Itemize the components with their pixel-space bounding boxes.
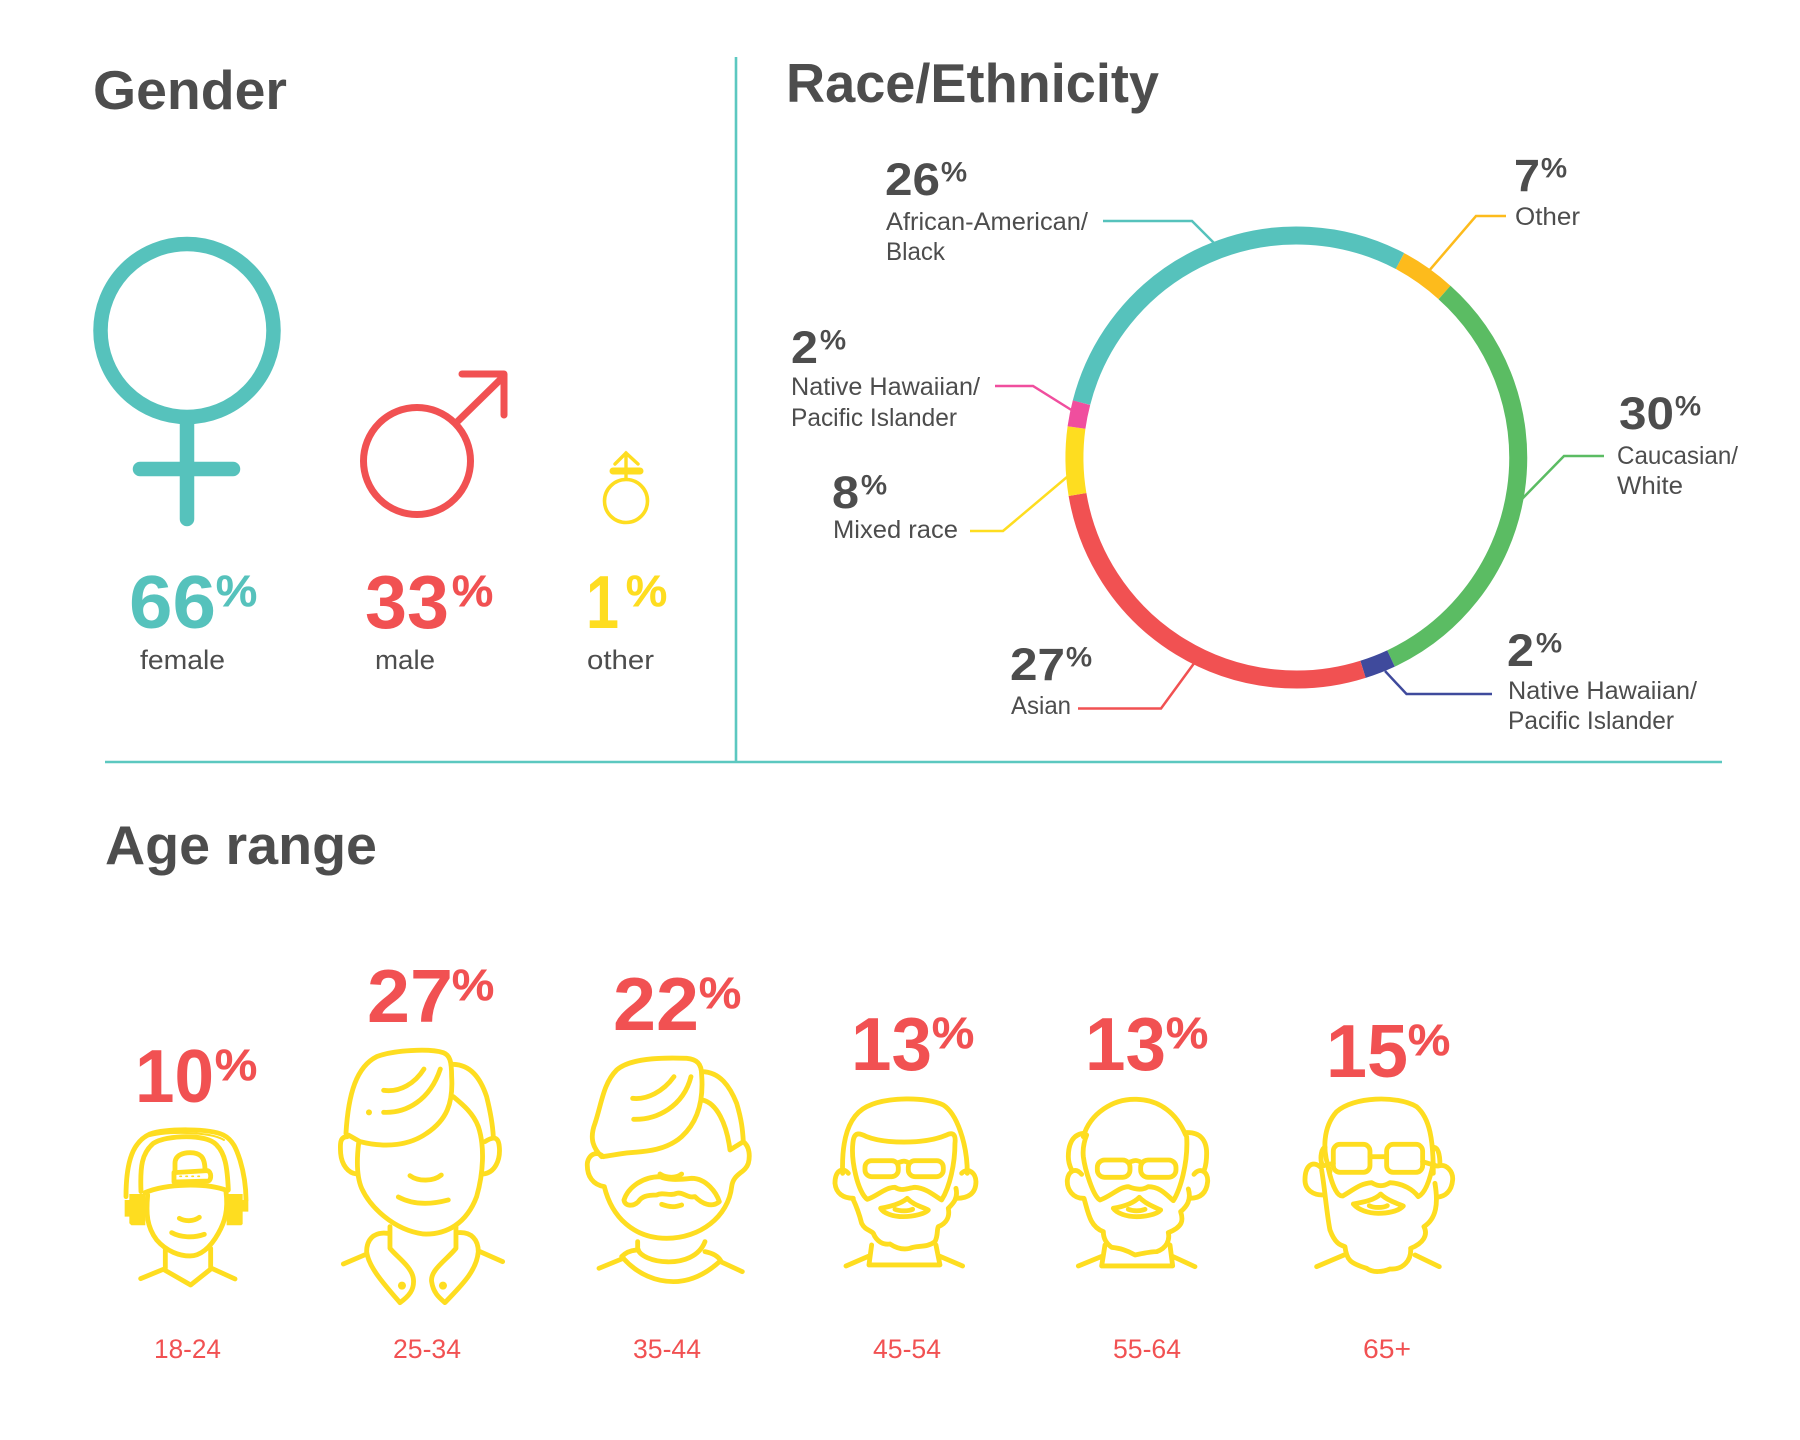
callout: 2% Native Hawaiian/Pacific Islander (left): % [820,325,846,355]
callout: 7% Other: Other [1515,203,1580,231]
age group 18-24 [125,1034,257,1364]
callout: 2% Native Hawaiian/Pacific Islander (left): Pacific Islander [791,404,957,432]
callout: 30% Caucasian/White: % [1675,391,1701,421]
callout: 7% Other [1428,150,1580,272]
age group 25-34: 25-34 [393,1334,461,1364]
callout: 7% Other: 7 [1514,150,1540,201]
callout: 26% African-American/Black [885,154,1216,266]
age group 18-24: 18-24 [154,1334,221,1364]
age group 35-44: % [699,970,741,1018]
stat: 33% male: male [375,645,435,675]
callout: 2% Native Hawaiian/Pacific Islander (right): 2 [1507,625,1534,676]
icon: senior with large glasses and long beard [1305,1099,1453,1272]
stat: 66% female: % [216,568,257,616]
stat: 1% other: other [587,645,654,675]
age group 25-34: % [452,962,494,1010]
age group 25-34: 27 [367,954,453,1038]
callout: 27% Asian: Asian [1011,692,1071,720]
age group 45-54 [835,1002,976,1364]
age group 65+: % [1408,1017,1450,1065]
stat: 66% female [129,560,257,675]
age group 55-64: % [1166,1010,1208,1058]
panel: age range [105,814,1453,1364]
callout: 7% Other: % [1541,153,1567,183]
stat: 1% other: 1 [586,560,619,644]
callout: 2% Native Hawaiian/Pacific Islander (left): Native Hawaiian/ [791,373,980,401]
callout: 30% Caucasian/White [1522,388,1738,500]
callout: 26% African-American/Black: African-American/ [886,208,1088,236]
callout: 8% Mixed race: 8 [832,467,859,518]
callout: 27% Asian [1010,639,1195,720]
age group 65+ [1305,1009,1453,1364]
callout: 26% African-American/Black: Black [886,238,945,266]
callout: 26% African-American/Black: % [941,157,967,187]
age group 35-44 [587,962,749,1364]
heading: Gender: Gender [93,59,287,121]
stat: 66% female: 66 [129,560,216,644]
age group 35-44: 35-44 [633,1334,701,1364]
stat: 33% male: % [452,568,493,616]
age group 45-54: 13 [851,1002,932,1086]
callout: 2% Native Hawaiian/Pacific Islander (right): Pacific Islander [1508,707,1674,735]
icon: male symbol [364,374,504,514]
age group 65+: 65+ [1363,1334,1411,1364]
callout: 2% Native Hawaiian/Pacific Islander (right): Native Hawaiian/ [1508,677,1697,705]
callout: 8% Mixed race: Mixed race [833,516,958,544]
callout: 30% Caucasian/White: Caucasian/ [1617,442,1738,470]
callout: 30% Caucasian/White: 30 [1619,388,1674,439]
age group 18-24: % [215,1042,257,1090]
panel: gender [93,59,667,675]
stat: 1% other [586,560,667,675]
callout: 2% Native Hawaiian/Pacific Islander (left) [791,322,1073,432]
callout: 26% African-American/Black: 26 [885,154,940,205]
heading: Age range: Age range [105,814,377,876]
stat: 1% other: % [626,568,667,616]
donut chart [1074,235,1518,680]
icon: female symbol [100,244,274,519]
icon: young adult with swept hair and collar [340,1050,503,1303]
age group 45-54: 45-54 [873,1334,941,1364]
age group 55-64 [1067,1002,1208,1364]
age group 55-64: 13 [1085,1002,1166,1086]
callout: 2% Native Hawaiian/Pacific Islander (left): 2 [791,322,818,373]
icon: other gender symbol [604,453,648,522]
icon: middle-aged person with glasses and beard [835,1099,976,1266]
age group 35-44: 22 [613,962,699,1046]
callout: 2% Native Hawaiian/Pacific Islander (right) [1385,625,1697,735]
icon: adult with moustache [587,1058,749,1282]
stat: 33% male [365,560,493,675]
icon: young person with cap and headphones [125,1130,248,1285]
panel: race/ethnicity [786,52,1738,735]
age group 25-34 [340,954,503,1364]
age group 65+: 15 [1326,1009,1408,1093]
stat: 33% male: 33 [365,560,449,644]
icon: balding person with glasses and beard [1067,1099,1208,1267]
callout: 2% Native Hawaiian/Pacific Islander (right): % [1536,628,1562,658]
age group 45-54: % [932,1010,974,1058]
stat: 66% female: female [140,645,225,675]
callout: 8% Mixed race: % [861,470,887,500]
age group 18-24: 10 [135,1034,214,1118]
age group 55-64: 55-64 [1113,1334,1181,1364]
callout: 27% Asian: % [1066,642,1092,672]
callout: 8% Mixed race [832,467,1067,544]
heading: Race/Ethnicity: Race/Ethnicity [786,52,1159,114]
callout: 30% Caucasian/White: White [1617,472,1683,500]
callout: 27% Asian: 27 [1010,639,1065,690]
